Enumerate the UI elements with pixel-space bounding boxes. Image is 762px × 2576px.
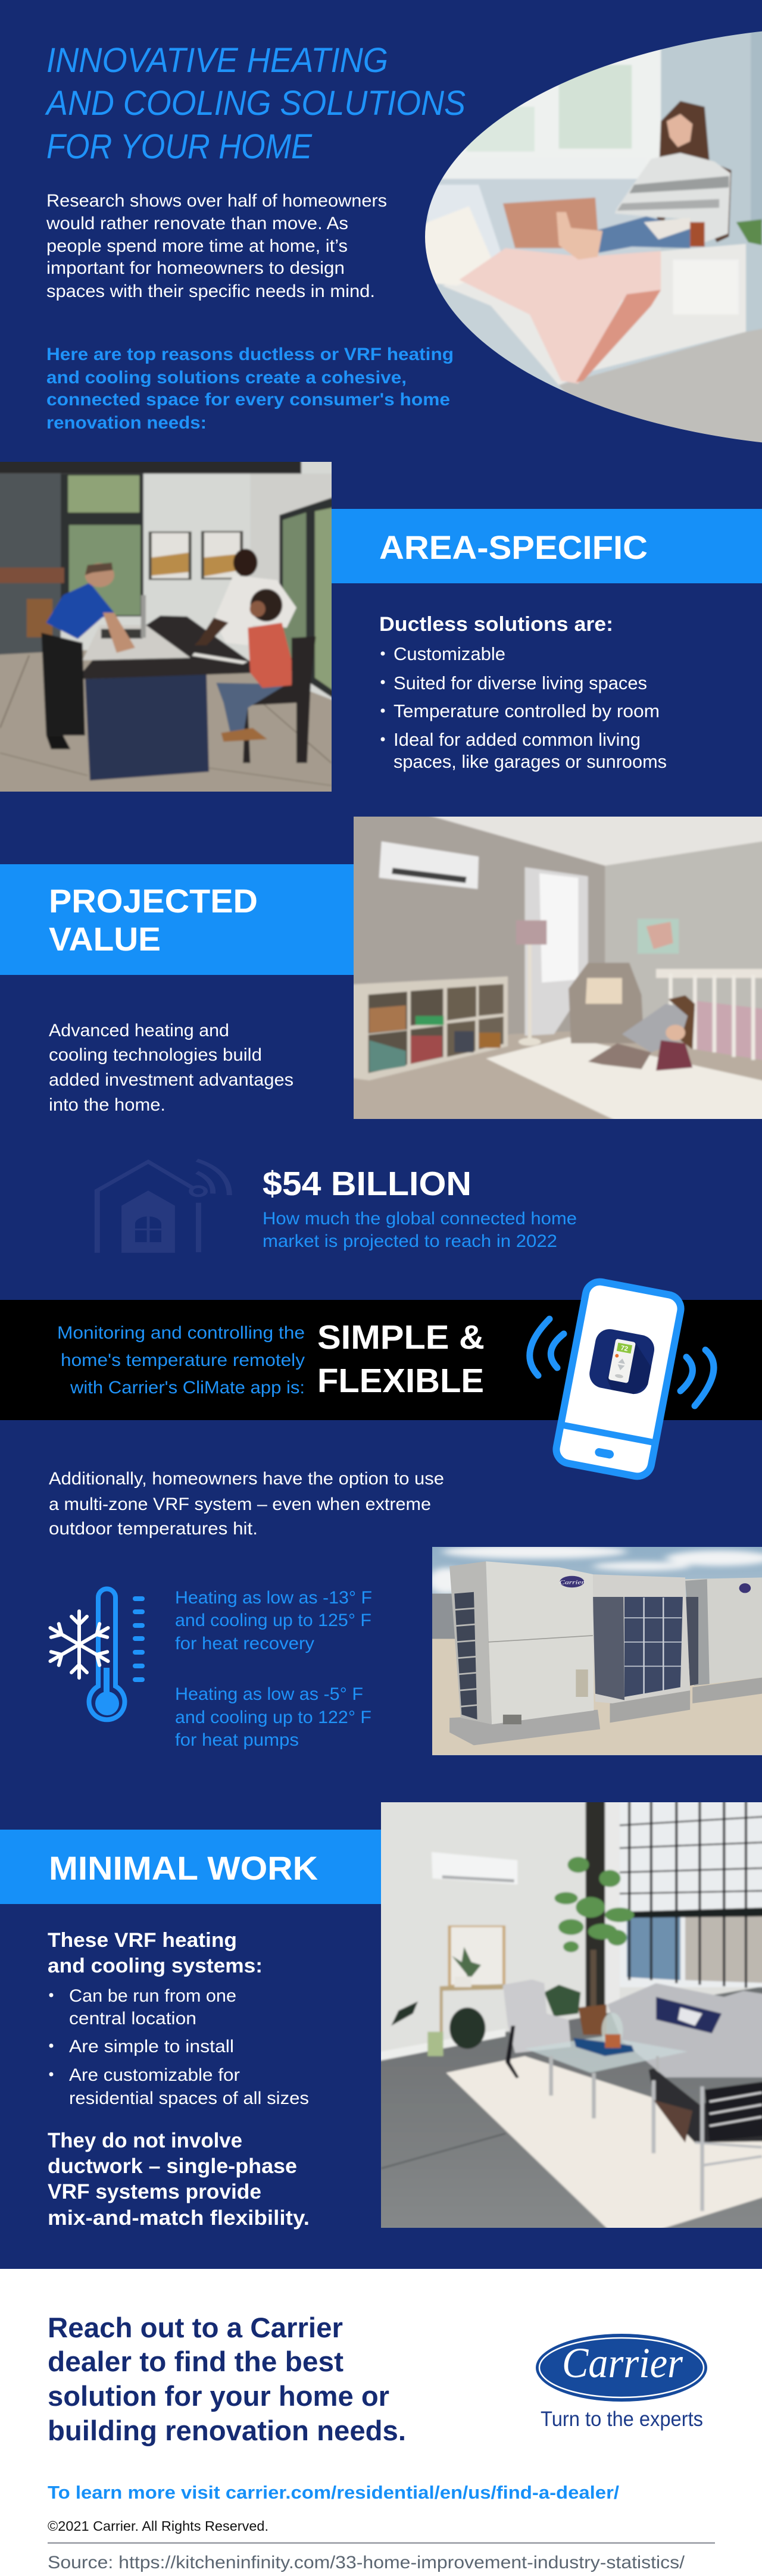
band: simple and flexible: with Carrier's CliMate app is: — [70, 1378, 305, 1398]
intro callout — [46, 345, 454, 433]
vrf systems list: and cooling systems: — [48, 1955, 263, 1977]
ductwork statement: They do not involve — [48, 2129, 242, 2152]
title: AND COOLING SOLUTIONS — [45, 84, 466, 123]
intro callout: renovation needs: — [46, 413, 207, 433]
band: simple and flexible: home's temperature remotely — [61, 1350, 305, 1370]
band: projected value heading: VALUE — [49, 920, 161, 958]
vrf systems list: Are simple to install — [69, 2037, 234, 2056]
multi-zone paragraph: a multi-zone VRF system – even when extreme — [49, 1495, 431, 1514]
temperature ranges: Heating as low as -5° F — [175, 1684, 363, 1704]
advanced technologies paragraph: into the home. — [49, 1095, 165, 1115]
photo: rooftop VRF units: Carrier — [560, 1579, 585, 1586]
title: FOR YOUR HOME — [46, 127, 313, 166]
find a dealer link text: To learn more visit carrier.com/residential/en/us/find-a-dealer/ — [48, 2482, 619, 2503]
advanced technologies paragraph: cooling technologies build — [49, 1045, 262, 1065]
multi-zone paragraph: Additionally, homeowners have the option to use — [49, 1469, 444, 1489]
vrf systems list: central location — [69, 2009, 196, 2028]
copyright: ©2021 Carrier. All Rights Reserved. — [48, 2518, 268, 2534]
multi-zone paragraph: outdoor temperatures hit. — [49, 1519, 258, 1539]
call to action: building renovation needs. — [48, 2415, 406, 2446]
vrf systems list: residential spaces of all sizes — [69, 2089, 309, 2108]
band: projected value heading: PROJECTED — [49, 882, 258, 920]
vrf systems list: These VRF heating — [48, 1929, 237, 1952]
temperature ranges: Heating as low as -13° F — [175, 1588, 372, 1608]
ductless solutions list: Customizable — [394, 643, 505, 664]
band: simple and flexible: SIMPLE & — [317, 1318, 485, 1356]
temperature ranges: and cooling up to 122° F — [175, 1708, 371, 1727]
temperature ranges: for heat recovery — [175, 1634, 314, 1653]
temperature ranges: for heat pumps — [175, 1730, 299, 1750]
title — [45, 41, 466, 166]
title: INNOVATIVE HEATING — [46, 41, 388, 80]
ductless solutions list: Ductless solutions are: — [379, 613, 613, 636]
photo: loft living room — [369, 1792, 762, 2239]
advanced technologies paragraph: Advanced heating and — [49, 1021, 229, 1040]
band: projected value heading — [0, 864, 354, 975]
advanced technologies paragraph: added investment advantages — [49, 1070, 293, 1090]
photo: nursery with ductless unit — [340, 809, 762, 1128]
icon: phone with climate app: 72 — [620, 1345, 629, 1353]
temperature ranges: and cooling up to 125° F — [175, 1611, 371, 1630]
photo: technician with homeowners in kitchen — [0, 452, 345, 801]
ductless solutions list: Ideal for added common living — [394, 729, 641, 750]
icon: signal waves — [530, 1319, 714, 1406]
call to action: solution for your home or — [48, 2380, 389, 2412]
multi-zone paragraph — [49, 1469, 444, 1539]
icon: connected home — [97, 1160, 229, 1253]
icon: thermometer and snowflake — [46, 1589, 145, 1720]
intro paragraph — [46, 191, 387, 301]
intro paragraph: would rather renovate than move. As — [46, 214, 348, 233]
stat: 54 billion — [263, 1165, 577, 1251]
call to action: Reach out to a Carrier — [48, 2312, 343, 2343]
ductwork statement: VRF systems provide — [48, 2180, 261, 2203]
band: simple and flexible: Monitoring and controlling the — [57, 1323, 305, 1343]
intro paragraph: Research shows over half of homeowners — [46, 191, 387, 211]
source: Source: https://kitcheninfinity.com/33-home-improvement-industry-statistics/ — [48, 2553, 685, 2572]
vrf systems list — [48, 1929, 309, 2108]
icon: phone with climate app — [554, 1280, 683, 1478]
ductwork statement: mix-and-match flexibility. — [48, 2206, 310, 2230]
intro paragraph: important for homeowners to design — [46, 258, 345, 278]
ductless solutions list: Suited for diverse living spaces — [394, 673, 647, 693]
stat: 54 billion: $54 BILLION — [263, 1165, 471, 1203]
ductless solutions list: Temperature controlled by room — [394, 701, 660, 721]
band: simple and flexible — [0, 1300, 762, 1420]
carrier logo: Turn to the experts — [541, 2408, 703, 2431]
advanced technologies paragraph — [49, 1021, 293, 1115]
band: simple and flexible: FLEXIBLE — [317, 1362, 484, 1400]
band: minimal work heading — [0, 1830, 381, 1904]
photo: rooftop VRF units — [427, 1545, 762, 1755]
stat: 54 billion: market is projected to reach in 2022 — [263, 1231, 557, 1251]
temperature ranges — [175, 1588, 372, 1750]
carrier logo — [536, 2334, 707, 2431]
intro paragraph: spaces with their specific needs in mind. — [46, 282, 375, 301]
band: minimal work heading: MINIMAL WORK — [49, 1849, 318, 1887]
ductwork statement: ductwork – single-phase — [48, 2155, 297, 2178]
stat: 54 billion: How much the global connected home — [263, 1209, 577, 1228]
ductwork statement — [48, 2129, 310, 2230]
call to action: dealer to find the best — [48, 2346, 343, 2377]
band: area-specific heading — [332, 509, 762, 583]
photo: woman on window seat in oval — [425, 31, 762, 443]
vrf systems list: Can be run from one — [69, 1986, 236, 2006]
footer panel — [0, 2269, 762, 2576]
band: area-specific heading: AREA-SPECIFIC — [379, 529, 648, 566]
carrier logo: Carrier — [562, 2339, 683, 2387]
intro paragraph: people spend more time at home, it’s — [46, 236, 348, 256]
intro callout: Here are top reasons ductless or VRF heating — [46, 345, 454, 364]
intro callout: and cooling solutions create a cohesive, — [46, 368, 407, 387]
vrf systems list: Are customizable for — [69, 2065, 240, 2085]
intro callout: connected space for every consumer's home — [46, 390, 450, 409]
ductless solutions list — [379, 613, 667, 772]
ductless solutions list: spaces, like garages or sunrooms — [394, 751, 667, 772]
call to action — [48, 2312, 406, 2446]
